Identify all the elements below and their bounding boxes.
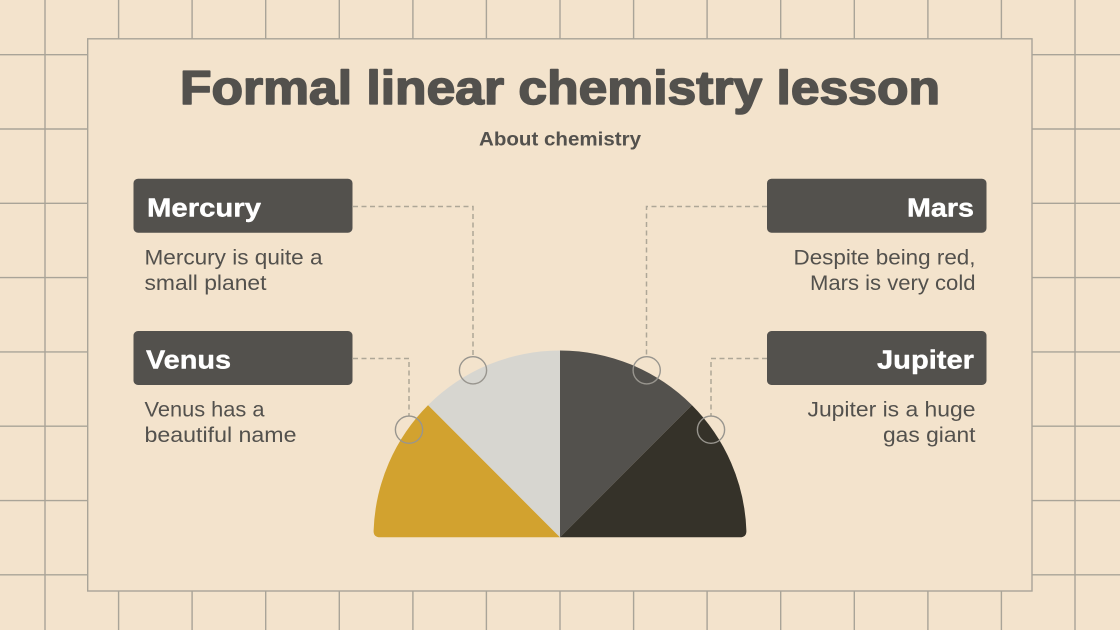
label box: Jupiter bbox=[767, 331, 986, 385]
connector: Jupiter bbox=[711, 358, 767, 416]
marker: Venus bbox=[395, 416, 423, 443]
segment: Jupiter bbox=[560, 405, 746, 537]
label box: Venus bbox=[134, 331, 352, 385]
title: Formal linear chemistry lesson bbox=[180, 61, 940, 114]
marker: Jupiter bbox=[697, 416, 725, 443]
main panel bbox=[88, 39, 1032, 591]
description: Venus: Venus has a bbox=[144, 398, 265, 422]
label box: Mars: Mars bbox=[907, 193, 974, 223]
panel: Mars bbox=[767, 179, 986, 295]
subtitle: About chemistry bbox=[479, 130, 641, 150]
label box: Venus: Venus bbox=[146, 345, 231, 375]
description: Mercury: Mercury is quite a bbox=[144, 246, 323, 269]
description: Venus bbox=[144, 398, 296, 447]
segment: Mars bbox=[560, 350, 692, 537]
description: Jupiter bbox=[808, 398, 976, 447]
connector: Venus bbox=[353, 358, 409, 416]
label box: Mercury: Mercury bbox=[147, 193, 262, 223]
description: Mercury bbox=[144, 246, 323, 295]
description: Mars: Despite being red, bbox=[794, 246, 976, 269]
marker: Mars bbox=[633, 357, 660, 384]
segment: Mercury bbox=[428, 350, 560, 537]
label box: Mars bbox=[767, 179, 986, 233]
chart: semicircle segments bbox=[374, 350, 746, 537]
label box: Mercury bbox=[134, 179, 352, 233]
marker: Mercury bbox=[459, 357, 487, 384]
description: Mars bbox=[794, 246, 976, 295]
label box: Jupiter: Jupiter bbox=[877, 345, 974, 375]
connector: Mars bbox=[646, 206, 767, 356]
segment: Venus bbox=[374, 405, 560, 537]
panel: Venus bbox=[134, 331, 352, 447]
description: Jupiter: gas giant bbox=[883, 424, 976, 447]
description: Venus: beautiful name bbox=[144, 424, 296, 447]
description: Mercury: small planet bbox=[144, 272, 267, 295]
panel: Jupiter bbox=[767, 331, 986, 447]
panel: Mercury bbox=[134, 179, 352, 295]
connector: Mercury bbox=[353, 206, 473, 356]
description: Mars: Mars is very cold bbox=[810, 272, 976, 295]
description: Jupiter: Jupiter is a huge bbox=[808, 398, 976, 422]
